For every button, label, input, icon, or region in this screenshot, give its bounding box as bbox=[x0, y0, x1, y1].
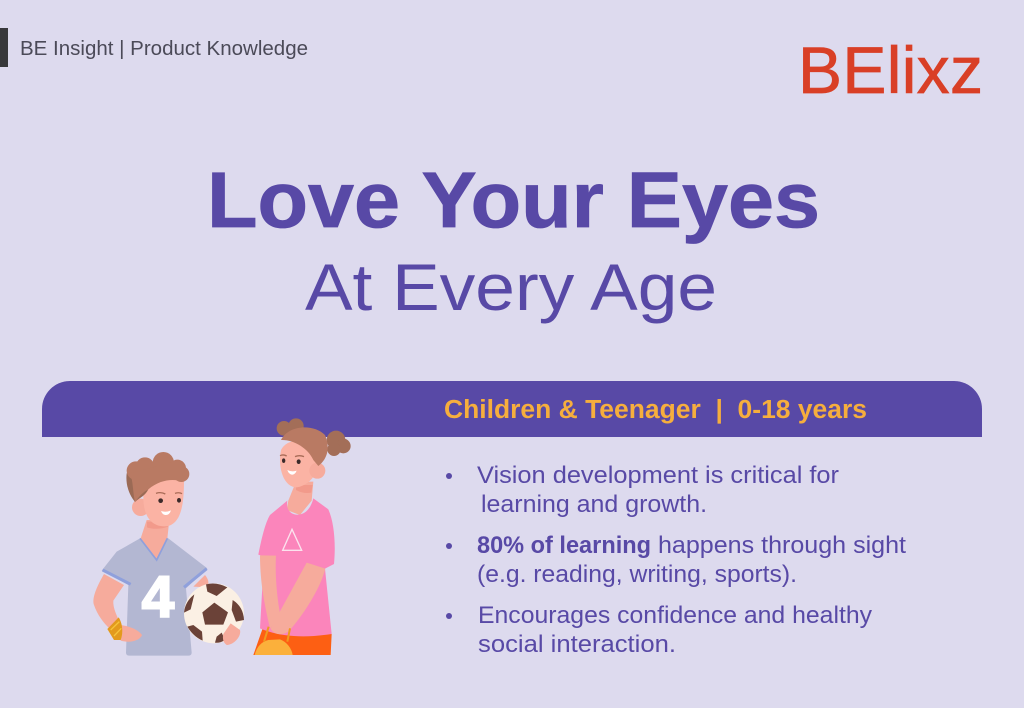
panel banner: age group bbox=[42, 381, 982, 437]
title bbox=[207, 155, 820, 324]
illustration: boy bbox=[93, 452, 208, 656]
bullet point: confidence: social interaction. bbox=[478, 631, 676, 658]
title: At Every Age bbox=[305, 250, 717, 324]
bullet point: confidence bbox=[446, 602, 872, 658]
text block: key points bbox=[446, 462, 906, 658]
illustration: boy and girl with football bbox=[93, 418, 351, 656]
bullet point: vision development: learning and growth. bbox=[481, 491, 707, 518]
bullet point: 80% of learning: (e.g. reading, writing, sports). bbox=[477, 561, 797, 588]
header tag: series label bbox=[0, 28, 308, 67]
logo: BElixz: BElixz bbox=[798, 33, 983, 107]
bullet point: 80% of learning: happens through sight bbox=[658, 532, 906, 559]
bullet point: 80% of learning: 80% of learning bbox=[477, 532, 651, 559]
panel banner: age group: Children & Teenager | 0-18 years bbox=[444, 396, 867, 424]
icon: football bbox=[184, 583, 244, 645]
title: Love Your Eyes bbox=[207, 155, 820, 244]
bullet point: 80% of learning bbox=[446, 532, 906, 588]
illustration: girl bbox=[253, 418, 351, 655]
number 4 on shirt: 4 bbox=[142, 565, 175, 630]
bullet point: vision development: Vision development is critical for bbox=[477, 462, 839, 489]
header tag: series label: BE Insight | Product Knowledge bbox=[20, 38, 308, 60]
bullet point: vision development bbox=[446, 462, 839, 518]
bullet point: confidence: Encourages confidence and healthy bbox=[478, 602, 872, 629]
